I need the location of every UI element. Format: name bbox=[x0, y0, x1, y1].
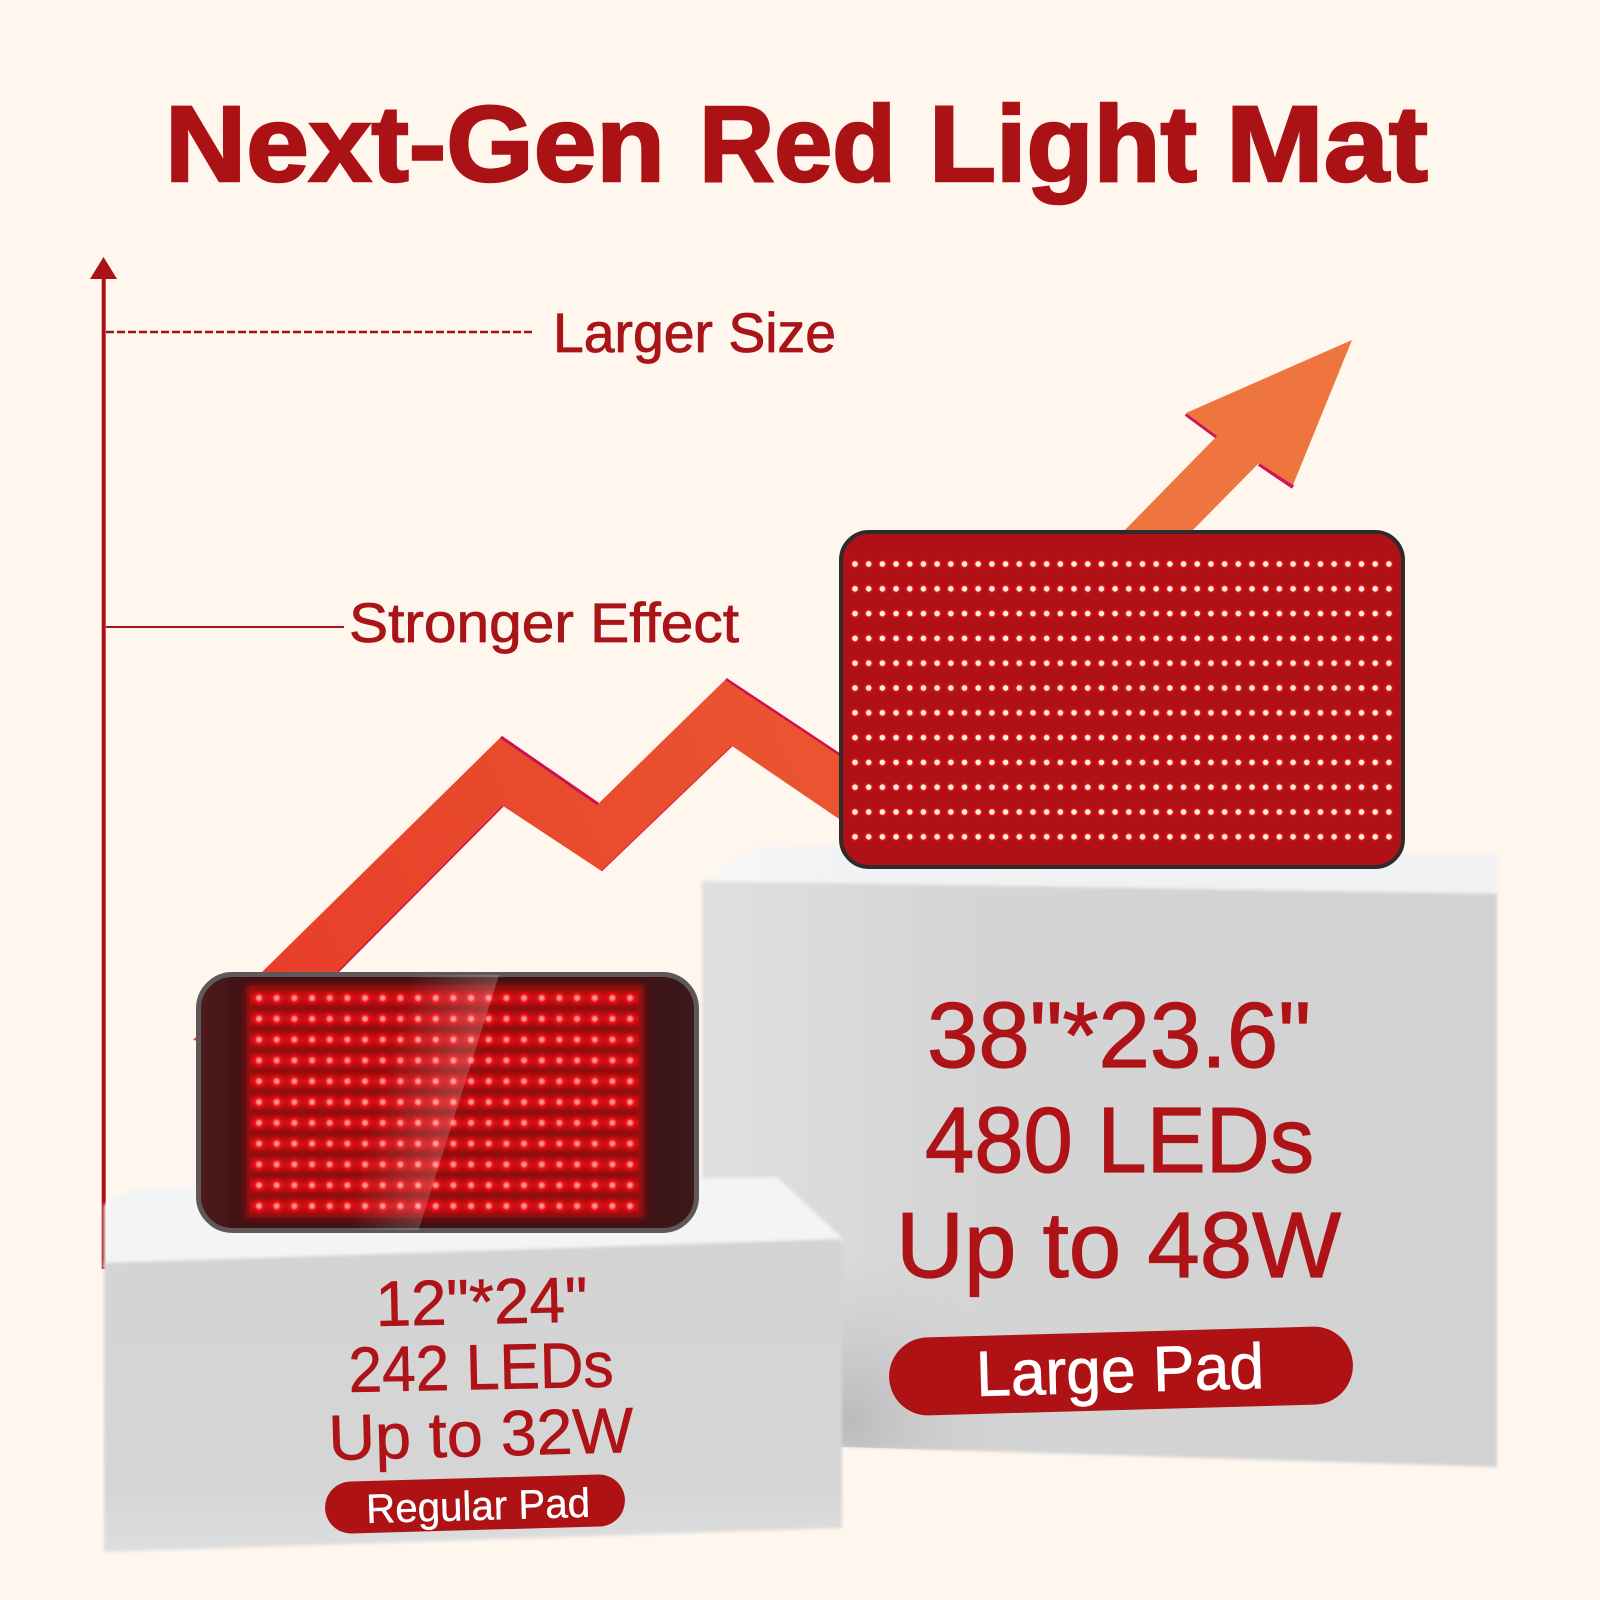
label: larger size with dashed leader: Larger Size bbox=[553, 301, 836, 364]
title word: light: Light bbox=[929, 83, 1197, 204]
mat body bbox=[841, 532, 1403, 867]
arrow: red zigzag trend bbox=[193, 679, 845, 1050]
regular pedestal front face bbox=[104, 1239, 842, 1552]
vertical axis arrow bbox=[90, 257, 117, 1269]
badge: large pad: Large Pad bbox=[975, 1330, 1265, 1410]
title word: red: Red bbox=[699, 83, 896, 204]
badge: regular pad bbox=[324, 1474, 626, 1534]
LED grid 40 by 12 bbox=[848, 552, 1396, 849]
arrow: orange head bbox=[1120, 340, 1352, 535]
power: Up to 32W bbox=[327, 1394, 635, 1474]
large red light mat bbox=[841, 532, 1403, 867]
LED count: 480 LEDs bbox=[925, 1088, 1314, 1192]
title word: mat: Mat bbox=[1226, 83, 1428, 204]
large pad specs bbox=[896, 983, 1341, 1297]
mat body bbox=[198, 974, 696, 1230]
large pedestal shading bbox=[841, 1317, 962, 1450]
glass reflection bbox=[362, 975, 499, 1230]
title word: next-gen: Next-Gen bbox=[165, 83, 665, 204]
title bbox=[165, 83, 1428, 204]
size: 12"*24" bbox=[375, 1264, 588, 1340]
LED count: 242 LEDs bbox=[348, 1328, 614, 1406]
regular red light mat bbox=[198, 974, 696, 1232]
panel: large pedestal bbox=[702, 845, 1497, 1470]
badge: large pad bbox=[888, 1326, 1354, 1416]
power: Up to 48W bbox=[896, 1193, 1341, 1297]
label: stronger effect with leader: Stronger Effect bbox=[349, 591, 739, 654]
regular pedestal top face bbox=[104, 1177, 842, 1268]
badge: regular pad: Regular Pad bbox=[365, 1480, 591, 1532]
large pedestal top face bbox=[702, 845, 1497, 900]
size: 38"*23.6" bbox=[927, 983, 1311, 1087]
red glow bbox=[246, 985, 644, 1218]
LED grid 22 by 11 bbox=[250, 988, 639, 1216]
panel: regular pedestal bbox=[104, 1177, 842, 1552]
regular pad specs bbox=[327, 1264, 635, 1474]
large pedestal front face bbox=[702, 881, 1497, 1467]
